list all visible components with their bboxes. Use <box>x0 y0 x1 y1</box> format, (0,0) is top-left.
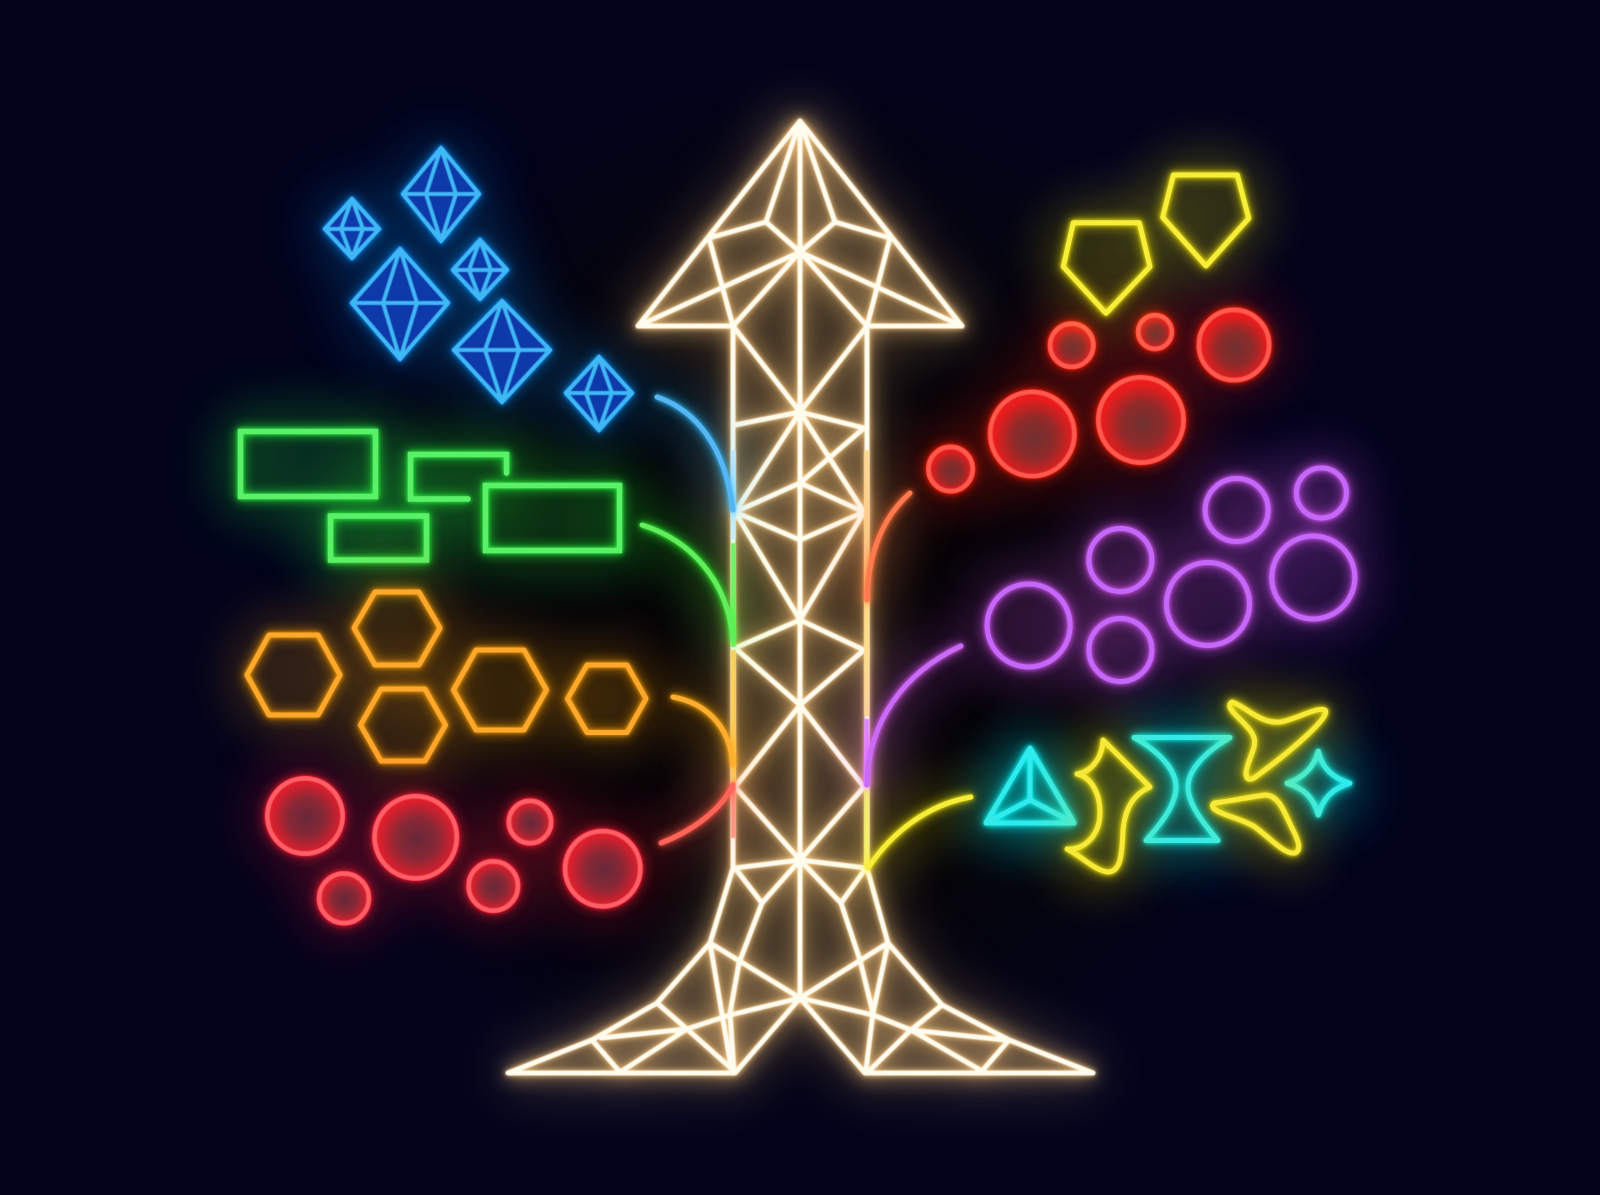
group: green rectangles <box>240 432 620 560</box>
group: cyan shapes <box>986 738 1350 840</box>
circle <box>1089 528 1152 592</box>
circle <box>1272 536 1355 619</box>
triangle <box>986 748 1074 823</box>
circle <box>1166 562 1250 646</box>
left shaft amber <box>731 650 736 785</box>
left shaft blue <box>731 450 736 540</box>
pentagon 1 <box>1063 223 1150 313</box>
arrow glow <box>508 121 1093 1073</box>
arrow cell tint <box>508 121 1093 1073</box>
hourglass <box>1134 738 1230 840</box>
curve: green <box>642 525 733 640</box>
circle <box>319 874 369 923</box>
red circle outlines left <box>268 778 640 923</box>
left shaft red <box>731 787 736 838</box>
circle <box>565 831 640 906</box>
diamond 2 <box>325 199 379 258</box>
hexagon 5 <box>568 665 646 732</box>
circle <box>1138 315 1172 349</box>
central arrow <box>508 121 1093 1073</box>
connector curves <box>642 397 971 868</box>
curve: purple <box>867 646 961 785</box>
circle <box>509 801 551 843</box>
circle <box>1098 378 1184 462</box>
curve: orange <box>673 697 733 765</box>
diamond 3 <box>352 249 448 359</box>
blob bottom right <box>1213 795 1299 853</box>
hexagon 4 <box>454 650 546 730</box>
circle <box>375 796 457 878</box>
right shaft yellow <box>864 789 869 868</box>
pentagon 2 <box>1163 175 1249 266</box>
curve: coral <box>867 493 910 600</box>
curve: red <box>661 785 733 843</box>
circle <box>929 447 973 491</box>
diamond 1 <box>403 148 479 241</box>
diamond 5 <box>454 301 550 402</box>
circle <box>987 584 1070 667</box>
hexagon 1 <box>247 635 340 715</box>
diamond outlines <box>325 148 632 430</box>
group: blue diamonds <box>325 148 632 430</box>
open rectangle <box>410 454 506 499</box>
dark vignette behind artwork <box>300 60 1300 1140</box>
red circle outlines right <box>929 310 1269 491</box>
circle <box>268 778 342 854</box>
group: orange hexagons <box>247 592 646 761</box>
circle <box>1296 468 1346 518</box>
diamond 4 <box>453 240 507 299</box>
right shaft purple <box>864 719 869 787</box>
blob top right <box>1230 702 1326 779</box>
diamond 6 <box>566 357 632 430</box>
circle <box>1199 310 1269 380</box>
circle <box>1050 324 1093 367</box>
rectangle 3 <box>330 516 426 560</box>
left shaft green <box>731 543 736 647</box>
hexagon 3 <box>360 689 446 761</box>
four point star <box>1287 751 1350 815</box>
group: purple circles <box>987 468 1355 682</box>
hexagon 2 <box>354 592 440 665</box>
circle <box>990 392 1074 476</box>
group: red circles right <box>929 310 1269 491</box>
rectangle 1 <box>240 432 376 496</box>
rectangle 4 <box>486 486 620 550</box>
group: yellow pentagons <box>1063 175 1249 313</box>
circle <box>1089 618 1152 682</box>
right shaft orange <box>864 450 869 600</box>
shaft colour segments <box>733 450 867 868</box>
curve: blue <box>657 397 733 510</box>
circle <box>1205 478 1268 542</box>
group: yellow organic shapes <box>1067 702 1326 872</box>
group: red circles left <box>268 778 640 923</box>
right shaft amber <box>864 600 869 716</box>
curve: yellow <box>868 797 971 868</box>
blob left <box>1067 740 1150 872</box>
circle <box>469 862 518 910</box>
arrow core lines <box>508 121 1093 1073</box>
